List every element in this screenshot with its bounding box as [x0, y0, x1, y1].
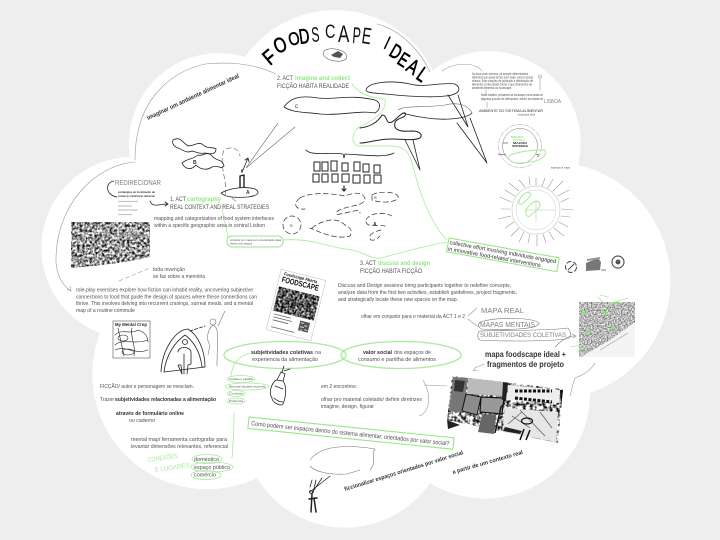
sketch: wavy blobs B	[173, 139, 224, 169]
sketch: person on hill with lines: A	[246, 190, 250, 196]
handwriting: map notes: MAPA REAL	[481, 308, 524, 315]
text: em 2 encontros: imagine, design, figurar	[321, 404, 374, 410]
title: FOODSCAPE IDEAL: A	[403, 53, 424, 80]
handwriting: map notes	[468, 308, 576, 347]
text: foodscape definition: algumas poucas de metrópoles, dentro da cidade de	[481, 97, 543, 101]
small green note	[227, 236, 283, 247]
diagram: sunburst	[498, 177, 573, 246]
title: FOODSCAPE IDEAL: I	[381, 34, 393, 54]
venn: subjetividades coletivas: experiencia da alimentação	[252, 357, 318, 363]
callout: collective effort: in innovative food-related interventions	[447, 247, 541, 269]
sketch: wavy blobs B: B	[193, 160, 197, 166]
text: em 2 encontros: em 2 encontros:	[321, 384, 357, 390]
heading: act 2: imagine and collect	[295, 76, 350, 82]
text: ficção block: ou caderno	[129, 418, 155, 424]
heading: act 3	[360, 261, 430, 275]
pills: place categories: espaço público	[194, 465, 230, 471]
heading: act 1: 1. ACT	[170, 197, 186, 203]
callout: collective effort: collective effort involving individuals engaged	[449, 240, 556, 265]
text: role-play: connections to food that guide the design of spaces where these connections can	[76, 294, 257, 300]
title: FOODSCAPE IDEAL: C	[325, 21, 335, 43]
text: act 1 description: within a specific geographic area in central Lisbon	[153, 223, 265, 229]
text: foodscape definition: AMBIENTE DO SISTEMA ALIMENTAR	[479, 108, 543, 113]
small pills: subjective notes: Memória/ saudade recorrente	[229, 384, 266, 388]
text: role-play: role-play exercises explore how fiction can inhabit reality, uncovering subjective	[76, 288, 253, 294]
heading: mapa foodscape ideal: mapa foodscape ideal +	[485, 349, 566, 359]
poster: foodscape: FOODSCAPE	[281, 275, 320, 293]
text: role-play: thrive. This involves delving into recurrent cravings, surreal meals, and a mental	[76, 301, 253, 307]
green connector lines	[222, 84, 447, 458]
title: FOODSCAPE IDEAL: F	[259, 46, 281, 70]
venn: subjetividades coletivas: subjetividades coletivas	[251, 350, 313, 356]
sketch: mental map: My Mental Crop	[115, 322, 147, 327]
text: ficção block: FICÇÃO/ autor e personagem se mesclam.	[100, 383, 194, 390]
text: act 3 description: analyze data from the first two activities, establish guidelines, project fragments,	[338, 290, 517, 296]
title: FOODSCAPE IDEAL: O	[270, 32, 290, 58]
caption: small sunburst note: legenda do mapa	[551, 166, 571, 170]
text: foodscape definition	[472, 72, 561, 116]
image: aerial texture	[71, 222, 150, 268]
heading: mapa foodscape ideal: fragmentos de projeto	[487, 359, 564, 369]
title: FOODSCAPE IDEAL: O	[286, 28, 302, 50]
text: act 3 description	[338, 283, 517, 303]
title: FOODSCAPE IDEAL: L	[412, 62, 433, 87]
sketch: dashed map regions: B	[290, 223, 293, 228]
diagram: ring	[498, 124, 545, 168]
heading: act 3: discuss and design	[378, 261, 430, 267]
text: ficção block: Trazer	[100, 397, 114, 403]
heading: mapa foodscape ideal	[485, 349, 566, 369]
text: em 2 encontros: olhar pro material coletado/ definir diretrizes	[321, 397, 422, 403]
text: foodscape definition: Neste trabalho, pensamos na foodscape numa escala de	[481, 93, 543, 97]
heading: a partir de: a partir de um contexto real	[452, 450, 524, 476]
heading: act 3: FICÇÃO HABITA FICÇÃO	[360, 268, 422, 275]
cloud inner outline strokes	[56, 24, 482, 291]
heading: act 1: cartography	[187, 197, 222, 203]
diagram: ring: SISTEMAS	[512, 144, 528, 148]
text: toda invenção: toda invenção	[153, 267, 185, 273]
sketch: blob C	[284, 97, 380, 114]
sketch: mental map	[113, 321, 150, 358]
text: toda invenção	[119, 267, 205, 281]
map: green spots	[570, 295, 635, 357]
text: ficção block: mental map/ ferramenta cartografar para	[131, 437, 227, 443]
venn: valor social: valor social	[363, 350, 392, 356]
handwriting: green note	[147, 451, 191, 474]
text: ficção block: subjetividades relacionadas a alimentação	[115, 397, 217, 403]
heading: act 2	[277, 76, 350, 90]
title: FOODSCAPE IDEAL: P	[352, 22, 362, 49]
small green note: construir um mapa com a localização ideal	[230, 238, 281, 242]
small pills: subjective notes: Contato e partilha	[229, 377, 253, 381]
title: FOODSCAPE IDEAL: D	[297, 24, 311, 49]
venn: valor social: consumo e partilha de alimentos	[358, 357, 436, 363]
text: act 1 description: mapping and categorization of food system interfaces	[154, 216, 274, 222]
heading: act 3: 3. ACT	[360, 261, 376, 267]
handwriting: green note: CONEXÕES	[147, 451, 179, 464]
text: foodscape definition: acesso. Este conjunto de produção e distribuição de	[472, 79, 533, 83]
bracket arrow and notes: comércio metafóricas alimentar	[118, 194, 156, 198]
sketch: person on hill with lines	[221, 123, 295, 203]
text: olhar em conjunto: olhar em conjunto para o material da ACT 1 e 2	[361, 314, 465, 320]
small pills: subjective notes	[225, 376, 269, 404]
bracket arrow and notes: estratégias de localização de	[118, 190, 155, 194]
title: FOODSCAPE IDEAL: D	[386, 39, 406, 64]
text: foodscape definition: alimentos que quase temos (sem mais, outros menos)	[472, 76, 533, 80]
text: foodscape definition: No local onde vivemos, há sempre determinados	[472, 72, 528, 76]
handwriting: redirecionar: REDIRECIONAR	[115, 178, 161, 187]
sketch: dashed map regions	[283, 192, 398, 240]
title: FOODSCAPE IDEAL	[259, 21, 433, 87]
text: act 3 description: and strategically locate these new spaces on the map.	[338, 297, 458, 303]
handwriting: map notes: MAPAS MENTAIS	[480, 322, 535, 329]
callout: como podem: Como podem ser espaços dentro do sistema alimentar, orientados por valor social?	[251, 420, 450, 447]
heading: act 1: REAL CONTEXT AND REAL STRATEGIES	[170, 205, 269, 211]
sketch: tall building row	[306, 150, 394, 191]
venn: subjetividades coletivas: na	[315, 350, 321, 356]
venn: subjetividades coletivas	[224, 342, 346, 368]
icons: three emblems	[566, 256, 624, 272]
heading: imaginar um ambiente: imaginar um ambiente alimentar ideal	[146, 73, 241, 122]
venn: valor social	[341, 342, 461, 368]
heading: act 1	[170, 197, 269, 211]
text: foodscape definition: foodscape ideal	[518, 114, 535, 116]
small pills: subjective notes: Potência	[229, 399, 244, 403]
text: foodscape definition: alimentos conta-cidade forma o que chamamos de	[472, 82, 532, 86]
icon: plate under title	[322, 47, 348, 63]
sketch: dashed map regions: A	[373, 222, 377, 228]
poster: foodscape	[266, 269, 326, 341]
heading: act 2: 2. ACT	[277, 76, 293, 82]
sketch: dashed map regions: B	[374, 195, 377, 200]
diagram: ring: MICRO	[511, 135, 524, 139]
arrows: map to collage	[419, 363, 595, 416]
text: foodscape definition: ambiente alimentar ou foodscape.	[472, 86, 512, 90]
diagram: ring: ESCALA	[513, 138, 525, 142]
bracket arrow and notes	[108, 181, 168, 214]
sketch: figure under arch	[161, 311, 225, 374]
pills: place categories: comércio	[194, 472, 216, 478]
text: foodscape definition: LISBOA	[544, 99, 561, 105]
text: ficção block: através de formulário online	[116, 411, 184, 417]
poster: foodscape: Foodscape Aberta	[284, 271, 318, 284]
title: FOODSCAPE IDEAL: E	[360, 24, 373, 50]
small green note: desses novos espaços	[230, 242, 252, 246]
handwriting: map notes: SUBJETIVIDADES COLETIVAS	[480, 332, 567, 339]
title: FOODSCAPE IDEAL: E	[394, 47, 414, 72]
sketch: floating blobs with spikes	[360, 82, 487, 170]
sketch: person with balloon	[309, 447, 375, 512]
diagram: ring: MACRO	[513, 141, 528, 145]
small pills: subjective notes: Conforto	[229, 392, 244, 396]
heading: ficcionalizar: ficcionalizar espaços orientados por valor social	[344, 450, 464, 493]
text: ficção block: levantar dimensões relevantes, referencial	[131, 444, 228, 450]
text: act 1 description	[153, 216, 274, 229]
pills: place categories	[191, 454, 233, 480]
title: FOODSCAPE IDEAL: A	[338, 21, 349, 48]
handwriting: green note: E LUGARES	[154, 462, 191, 474]
heading: act 2: FICÇÃO HABITA REALIDADE	[277, 83, 349, 90]
venn: valor social: dos espaços de	[394, 350, 431, 356]
text: em 2 encontros	[321, 384, 422, 410]
sketch: blob C: c	[295, 104, 298, 110]
text: act 3 description: Discuss and Design sessions bring participants together to redefine concepts,	[338, 283, 511, 289]
title: FOODSCAPE IDEAL: S	[310, 23, 320, 47]
text: role-play: map of a routine commute	[76, 308, 135, 314]
text: role-play	[76, 288, 257, 314]
image: collage of photos	[447, 376, 563, 443]
text: ficção block	[100, 383, 228, 450]
pills: place categories: doméstico	[194, 457, 219, 463]
sketch: hand with bag	[270, 366, 290, 405]
text: toda invenção: se faz sobre a memória	[153, 274, 205, 280]
